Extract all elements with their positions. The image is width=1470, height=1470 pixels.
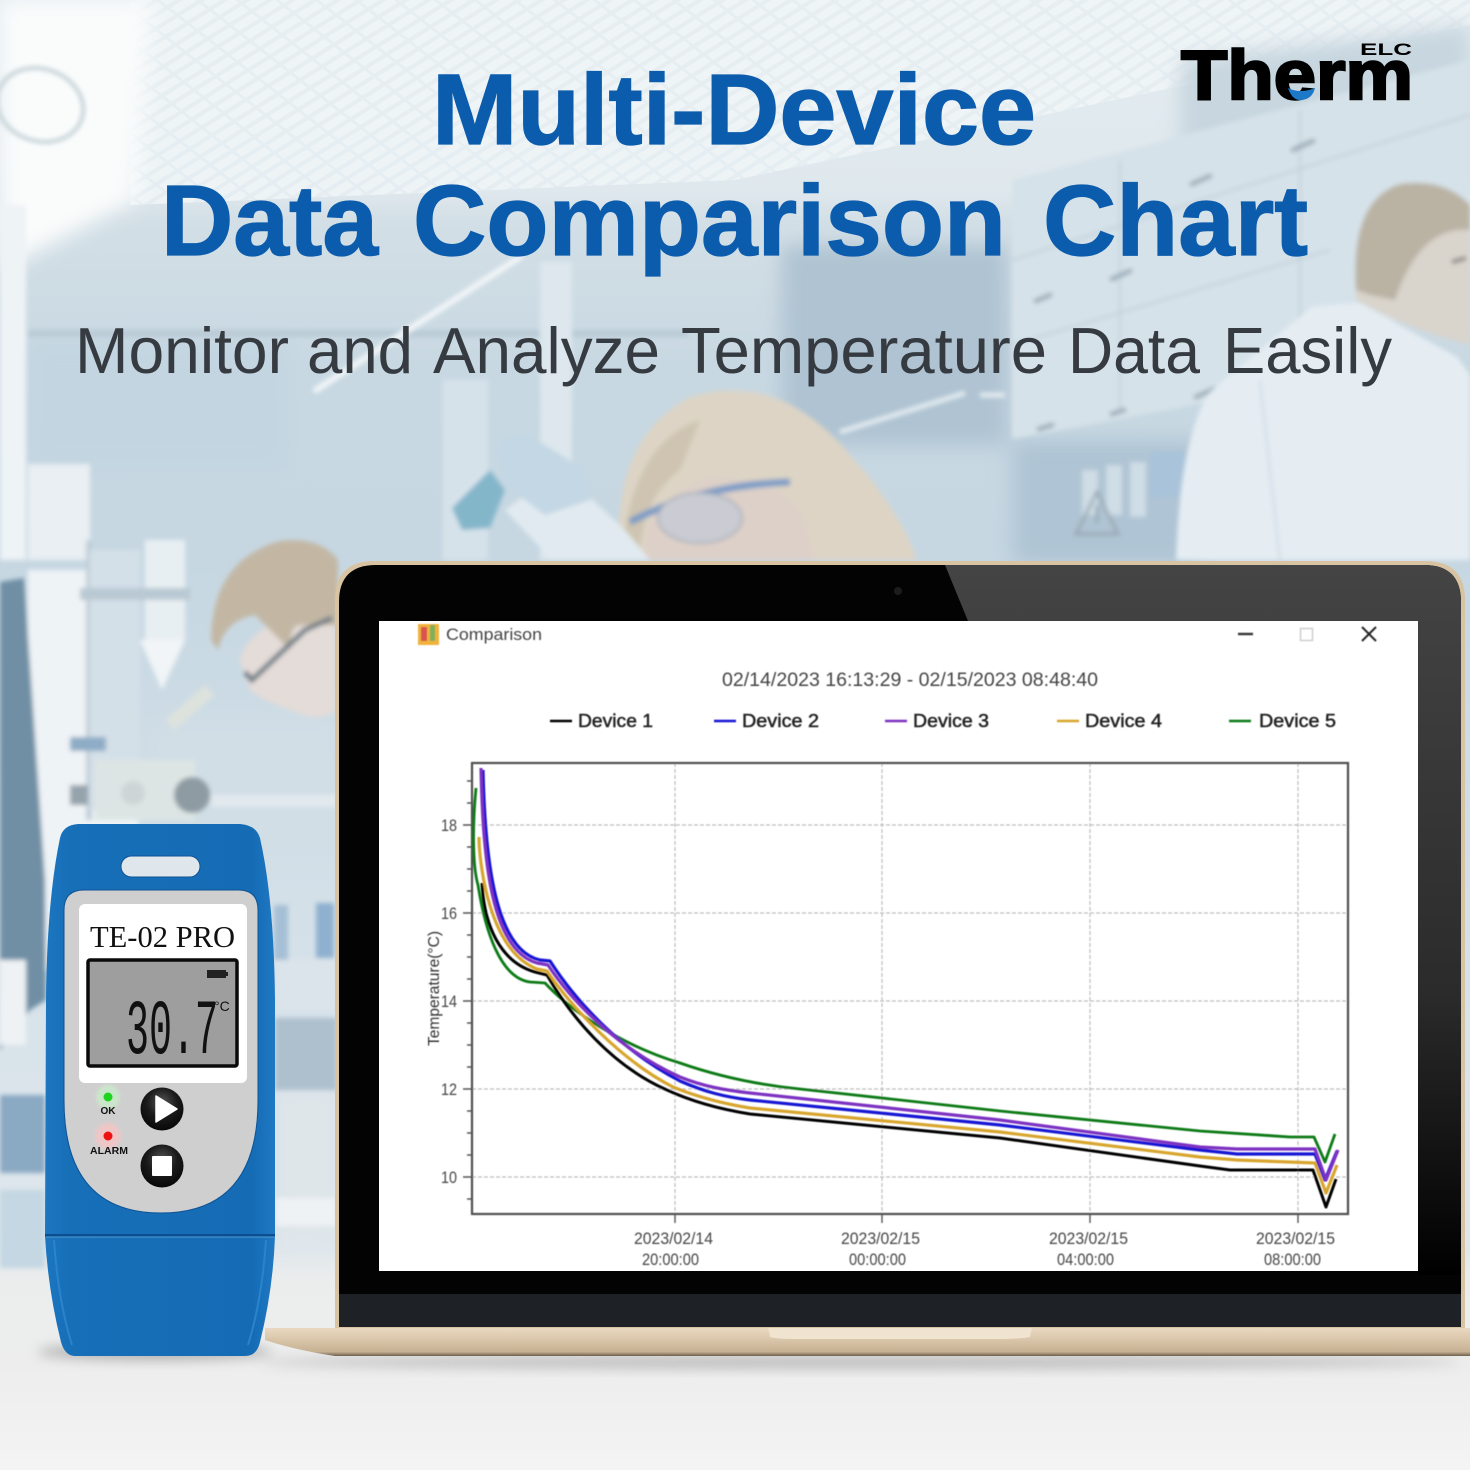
x axis labels xyxy=(634,1230,1335,1269)
series: Device 5 xyxy=(474,788,1335,1162)
alarm indicator: ALARM xyxy=(90,1145,128,1157)
bottles on shelf xyxy=(1082,462,1146,517)
lower bezel xyxy=(339,1294,1461,1327)
laptop xyxy=(265,561,1470,1356)
alarm indicator xyxy=(90,1123,128,1157)
title: Multi-Device xyxy=(432,54,1036,166)
wall bands xyxy=(0,205,26,560)
stop button xyxy=(140,1144,184,1188)
y axis labels xyxy=(441,817,457,1187)
hanging slot xyxy=(121,856,200,877)
sleeve and glove xyxy=(505,470,650,560)
x axis labels: 2023/02/15 xyxy=(1256,1230,1335,1248)
subtitle: and xyxy=(307,314,413,387)
logo: ELC Therm: ELC xyxy=(1360,40,1412,59)
ceiling xyxy=(130,0,1470,205)
legend xyxy=(550,710,1336,731)
device: TE-02 PRO data logger xyxy=(37,824,275,1360)
title: Chart xyxy=(1043,165,1308,277)
subtitle: Monitor xyxy=(75,314,289,387)
x axis labels: 2023/02/15 xyxy=(841,1230,920,1248)
legend: Device 5 xyxy=(1259,710,1336,731)
subtitle: Analyze xyxy=(433,314,660,387)
y axis labels: 12 xyxy=(441,1081,457,1099)
device body xyxy=(45,824,275,1356)
webcam xyxy=(894,587,902,595)
y axis title: Temperature(°C) xyxy=(426,931,443,1046)
woman face xyxy=(645,478,815,560)
left wall and monitor xyxy=(28,570,138,970)
x axis labels: 08:00:00 xyxy=(1264,1251,1321,1269)
x axis labels: 04:00:00 xyxy=(1057,1251,1114,1269)
woman goggles xyxy=(630,482,790,522)
y axis labels: 16 xyxy=(441,905,457,923)
bench objects xyxy=(276,1198,336,1226)
legend: Device 1 xyxy=(578,710,653,731)
window title bar: Comparison xyxy=(446,625,542,644)
right man coat xyxy=(1176,303,1470,560)
left man hair xyxy=(211,540,338,650)
model name: TE-02 PRO xyxy=(90,919,235,954)
window title bar xyxy=(418,624,1376,645)
light tube xyxy=(316,257,520,390)
left man glasses xyxy=(245,618,332,680)
series: Device 2 xyxy=(483,770,1337,1180)
warning sign xyxy=(1076,492,1118,534)
chart date range: 02/14/2023 16:13:29 - 02/15/2023 08:48:40 xyxy=(722,669,1098,691)
right man head xyxy=(1355,183,1470,345)
series: Device 3 xyxy=(481,768,1338,1180)
LCD display: °C xyxy=(214,998,230,1014)
subtitle: Temperature xyxy=(681,314,1047,387)
OK indicator xyxy=(96,1085,120,1117)
y axis labels: 14 xyxy=(441,993,457,1011)
LCD display xyxy=(88,960,237,1077)
legend: Device 3 xyxy=(913,710,989,731)
comparison window xyxy=(418,624,1376,1269)
x axis labels: 2023/02/15 xyxy=(1049,1230,1128,1248)
base notch xyxy=(768,1327,1032,1339)
title xyxy=(161,54,1308,277)
x axis labels: 2023/02/14 xyxy=(634,1230,713,1248)
microscope xyxy=(95,760,195,820)
line chart xyxy=(463,763,1348,1223)
subtitle xyxy=(75,314,1392,387)
label plate xyxy=(79,904,247,1083)
x axis labels: 00:00:00 xyxy=(849,1251,906,1269)
bottles behind device xyxy=(274,905,288,960)
lab stand xyxy=(86,540,92,820)
play button xyxy=(140,1088,184,1130)
x axis labels: 20:00:00 xyxy=(642,1251,699,1269)
logo: ELC Therm: Therm xyxy=(1181,36,1413,114)
left man face xyxy=(240,600,335,717)
series: Device 4 xyxy=(479,837,1337,1193)
cabinets xyxy=(1012,60,1470,439)
y axis labels: 10 xyxy=(441,1169,457,1187)
woman hair xyxy=(619,390,917,560)
title: Comparison xyxy=(413,165,1006,277)
laptop base xyxy=(265,1328,1470,1356)
bench xyxy=(212,795,337,807)
right bezel sheen xyxy=(945,565,1461,1275)
y axis labels: 18 xyxy=(441,817,457,835)
LCD display: 30.7 xyxy=(126,989,218,1077)
flask xyxy=(452,470,505,530)
lamp ring xyxy=(0,57,93,153)
series: Device 1 xyxy=(482,883,1336,1207)
legend: Device 2 xyxy=(742,710,819,731)
legend: Device 4 xyxy=(1085,710,1162,731)
subtitle: Easily xyxy=(1223,314,1392,387)
title: Data xyxy=(161,165,379,277)
subtitle: Data xyxy=(1068,314,1201,387)
OK indicator: OK xyxy=(100,1106,116,1117)
control panel xyxy=(64,890,258,1213)
laptop lid xyxy=(335,561,1465,1328)
screen xyxy=(379,621,1418,1271)
